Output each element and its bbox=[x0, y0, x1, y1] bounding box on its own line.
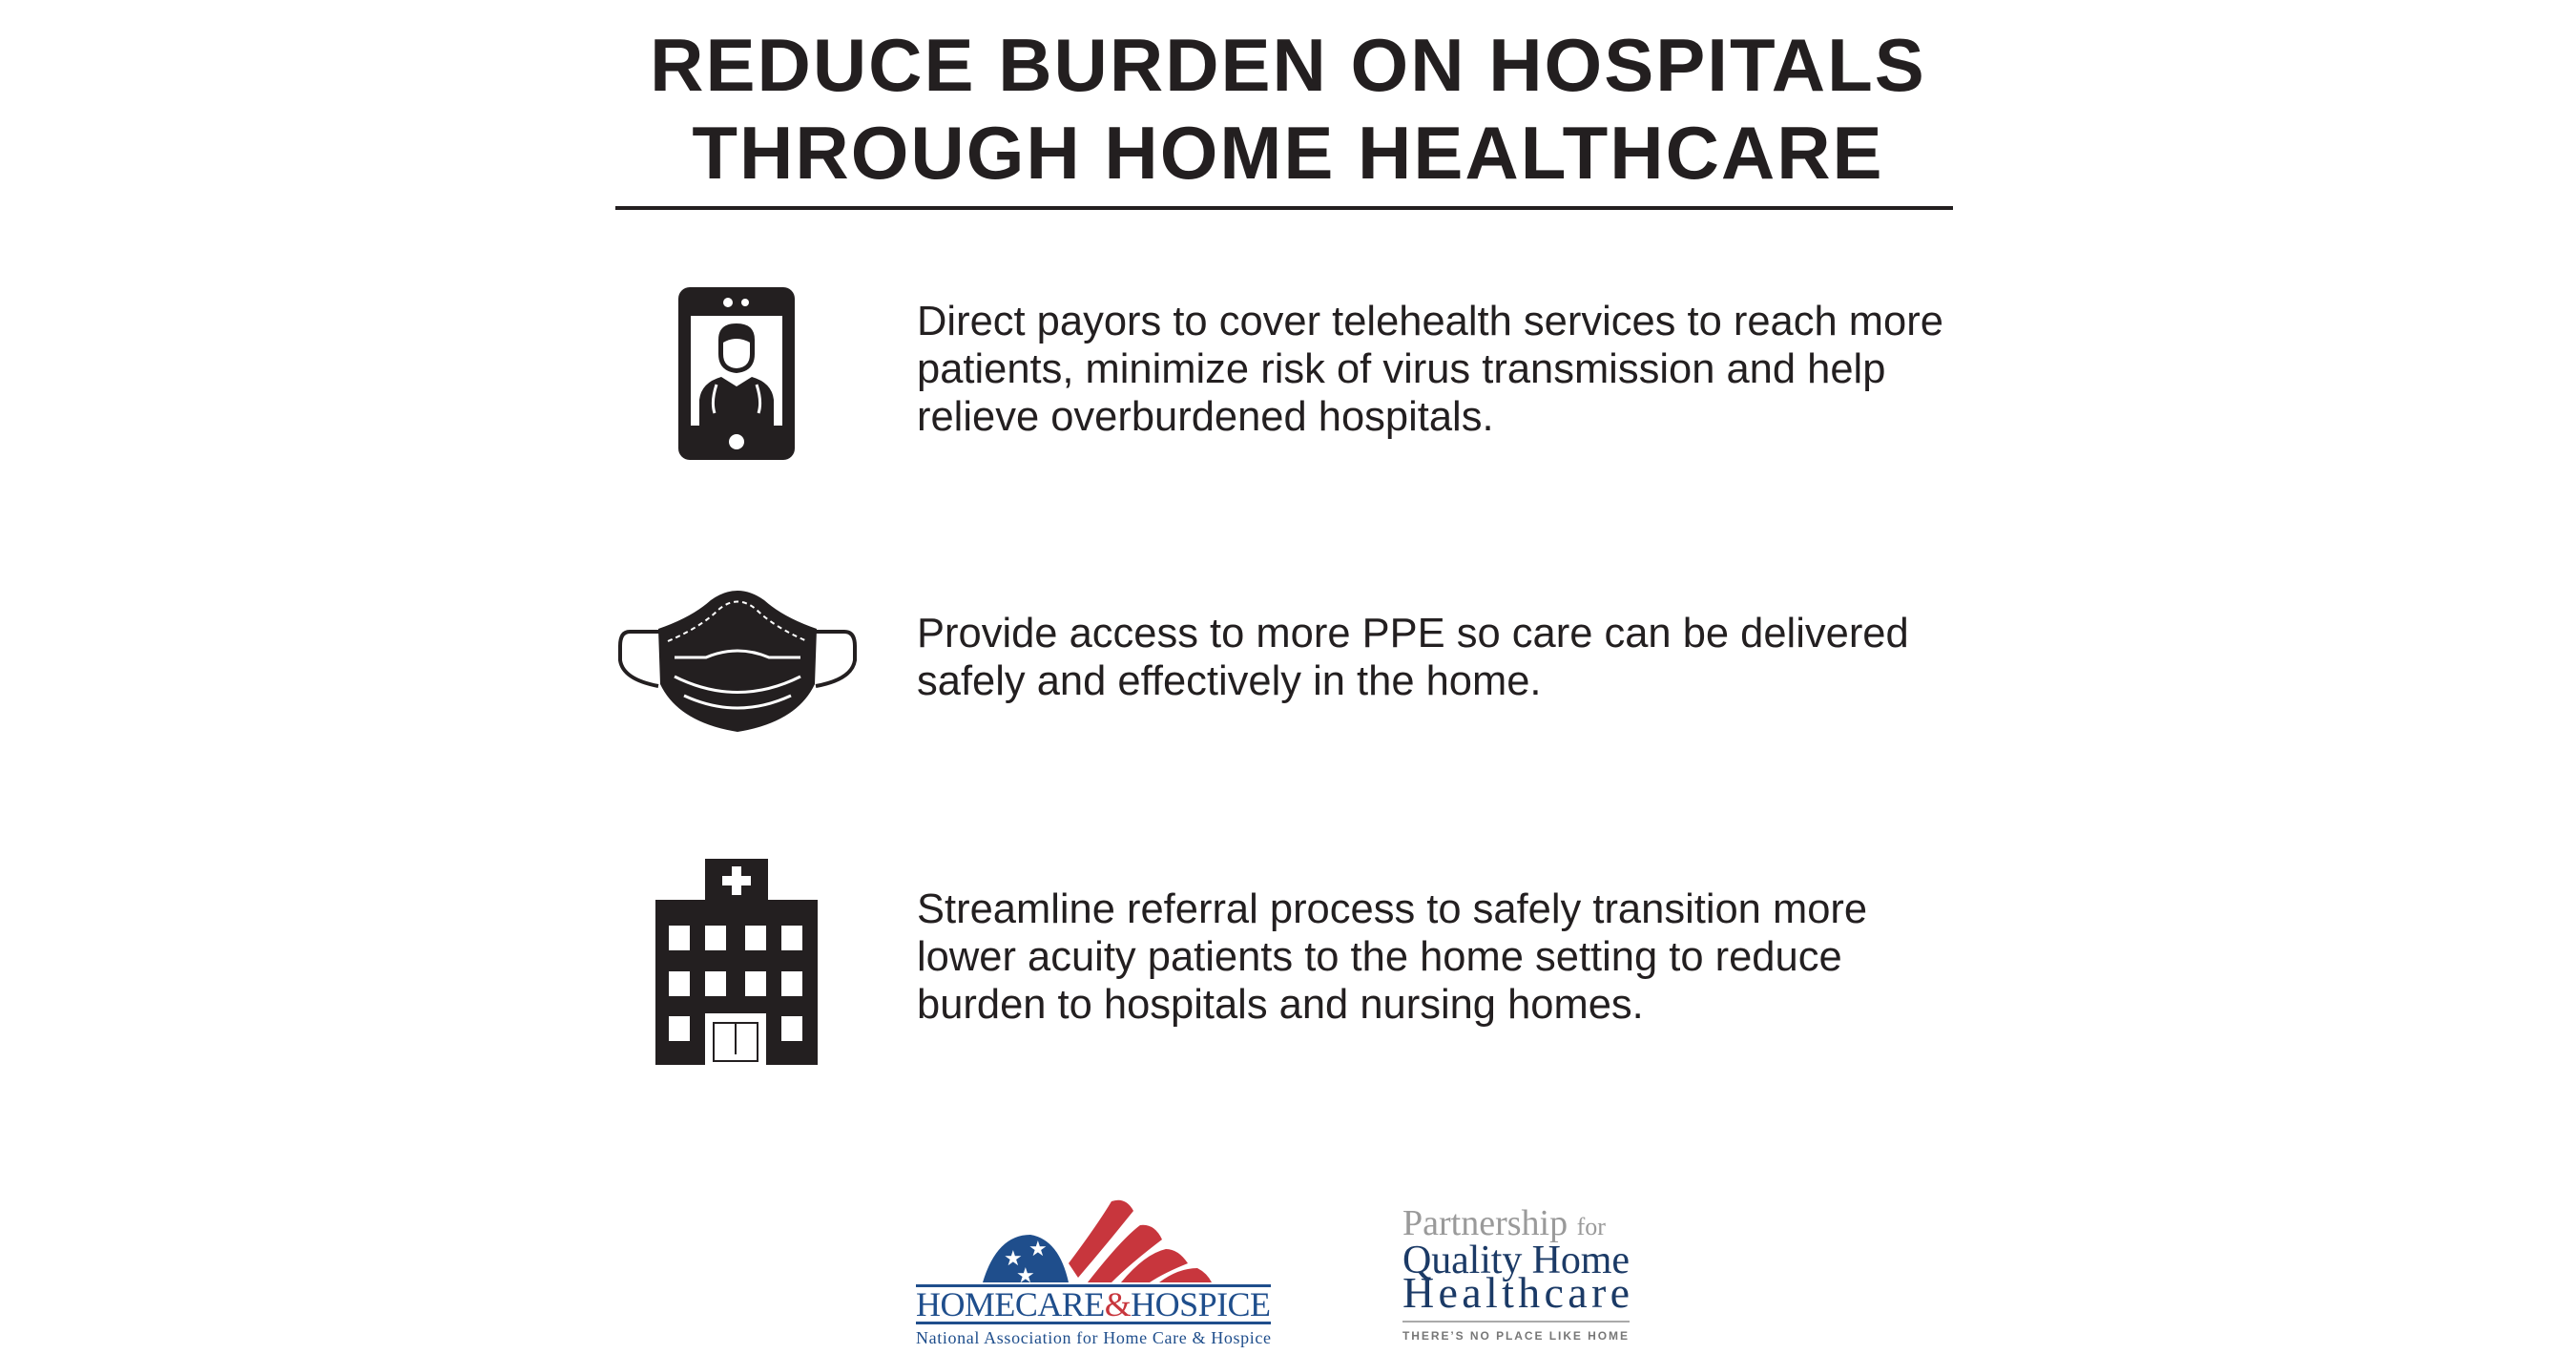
logo: NAHC: National Association for Home Care & Hospice bbox=[916, 1328, 1271, 1347]
logo: NAHC: HOMECARE&HOSPICE bbox=[916, 1285, 1271, 1323]
logo: Partnership for Quality Home Healthcare: THERE’S NO PLACE LIKE HOME bbox=[1402, 1329, 1630, 1343]
text: PPE bbox=[917, 611, 1909, 704]
logo: NAHC: ★ bbox=[1028, 1237, 1048, 1260]
logo: NAHC: ★ bbox=[1016, 1263, 1035, 1287]
logo: Partnership for Quality Home Healthcare: Partnership for bbox=[1402, 1203, 1606, 1243]
text: PPE: Provide access to more PPE so care can be delivered bbox=[917, 611, 1909, 656]
text: referral: burden to hospitals and nursing homes. bbox=[917, 982, 1644, 1028]
text: referral: lower acuity patients to the home setting to reduce bbox=[917, 934, 1842, 980]
icon: mask bbox=[618, 591, 857, 732]
logo: NAHC bbox=[916, 1200, 1271, 1347]
icon: hospital bbox=[655, 859, 818, 1065]
title bbox=[650, 23, 1926, 195]
title: THROUGH HOME HEALTHCARE bbox=[692, 111, 1884, 195]
text: telehealth bbox=[917, 299, 1943, 440]
text: PPE: safely and effectively in the home. bbox=[917, 658, 1542, 704]
text: telehealth: Direct payors to cover telehealth services to reach more bbox=[917, 299, 1943, 344]
logo: Partnership for Quality Home Healthcare: Quality Home bbox=[1402, 1239, 1630, 1282]
text: telehealth: relieve overburdened hospitals. bbox=[917, 394, 1494, 440]
text: telehealth: patients, minimize risk of virus transmission and help bbox=[917, 346, 1885, 392]
title: REDUCE BURDEN ON HOSPITALS bbox=[650, 23, 1926, 107]
logo: Partnership for Quality Home Healthcare bbox=[1402, 1203, 1630, 1343]
logo: Partnership for Quality Home Healthcare: Healthcare bbox=[1402, 1268, 1630, 1317]
text: referral: Streamline referral process to safely transition more bbox=[917, 886, 1867, 932]
icon: phone with doctor bbox=[678, 287, 795, 460]
text: referral bbox=[917, 886, 1867, 1028]
logo: NAHC: ★ bbox=[1004, 1246, 1023, 1270]
